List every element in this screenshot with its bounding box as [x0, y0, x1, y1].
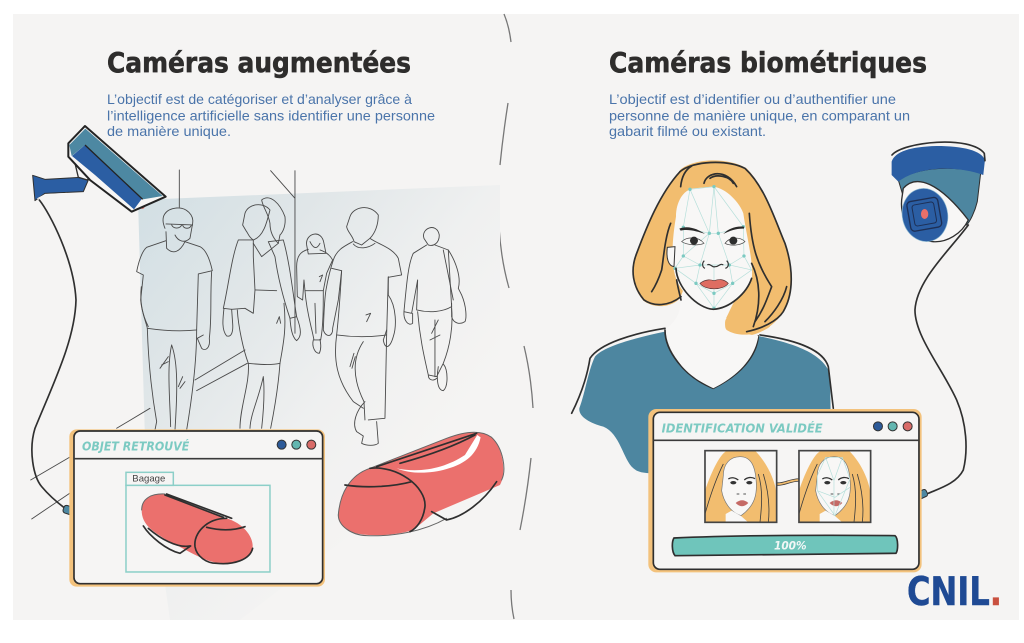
- reference face: [703, 451, 777, 522]
- text block: augmented cameras description: [107, 91, 435, 139]
- camera lens: [897, 182, 968, 246]
- link between faces: [777, 480, 799, 484]
- window: object found: [62, 429, 325, 587]
- facial mesh: [673, 185, 752, 310]
- link highlight: [777, 480, 799, 484]
- detection box with label: Bagage: [132, 474, 165, 484]
- detection box with label: [126, 472, 270, 572]
- progress bar: [672, 535, 898, 556]
- small red bag: [142, 494, 253, 564]
- text block: biometric cameras description: [609, 91, 910, 139]
- cable connector: [62, 505, 76, 516]
- woman portrait with facial mesh: [572, 160, 833, 473]
- pedestrian: man seen from behind with bag: [404, 228, 466, 391]
- camera light beam: [138, 185, 500, 620]
- shirt: [572, 328, 833, 473]
- cable: camera to window: [915, 225, 968, 493]
- title: Caméras augmentées: Caméras augmentées: [107, 47, 411, 79]
- cable: camera to window: [32, 200, 76, 508]
- text block: biometric cameras description: L’objectif est d’identifier ou d’authentifier une: [609, 91, 896, 107]
- window: identification validated: [648, 409, 928, 572]
- title: Caméras biométriques: Caméras biométriques: [609, 47, 927, 79]
- pedestrian: man with glasses: [137, 208, 212, 430]
- text block: augmented cameras description: l’intelligence artificielle sans identifier une personne: [107, 108, 435, 124]
- facial features: [676, 226, 752, 309]
- pedestrian: woman with ponytail: [223, 198, 300, 428]
- cable connector: [916, 489, 928, 500]
- street poles and ground lines: [31, 170, 295, 519]
- dashed central divider: [499, 14, 533, 619]
- window buttons: [873, 422, 912, 431]
- large red bag: [338, 432, 504, 536]
- icon: dome surveillance camera: [892, 142, 985, 493]
- scanned face with mesh: [797, 451, 871, 522]
- text block: augmented cameras description: de manière unique.: [107, 123, 231, 139]
- icon: bullet surveillance camera: [32, 126, 166, 508]
- pedestrian: woman in background: [297, 234, 333, 353]
- window title: OBJET RETROUVÉ: [82, 438, 190, 453]
- dome housing: [892, 142, 985, 225]
- text block: augmented cameras description: L’objectif est de catégoriser et d’analyser grâce à: [107, 91, 412, 107]
- window frame: [69, 429, 325, 587]
- window frame: [648, 409, 922, 572]
- text block: biometric cameras description: gabarit filmé ou existant.: [609, 123, 766, 139]
- camera body: [68, 126, 166, 212]
- pedestrian: man in white t-shirt: [323, 208, 402, 445]
- hair: [633, 160, 792, 388]
- CNIL logo: CNIL.: [907, 570, 1002, 615]
- window title: IDENTIFICATION VALIDÉE: [662, 420, 823, 435]
- progress bar: 100%: [774, 539, 807, 553]
- street scene with pedestrians: [31, 170, 466, 519]
- camera mount arm: [33, 163, 96, 201]
- text block: biometric cameras description: personne de manière unique, en comparant un: [609, 108, 910, 124]
- window buttons: [277, 440, 316, 449]
